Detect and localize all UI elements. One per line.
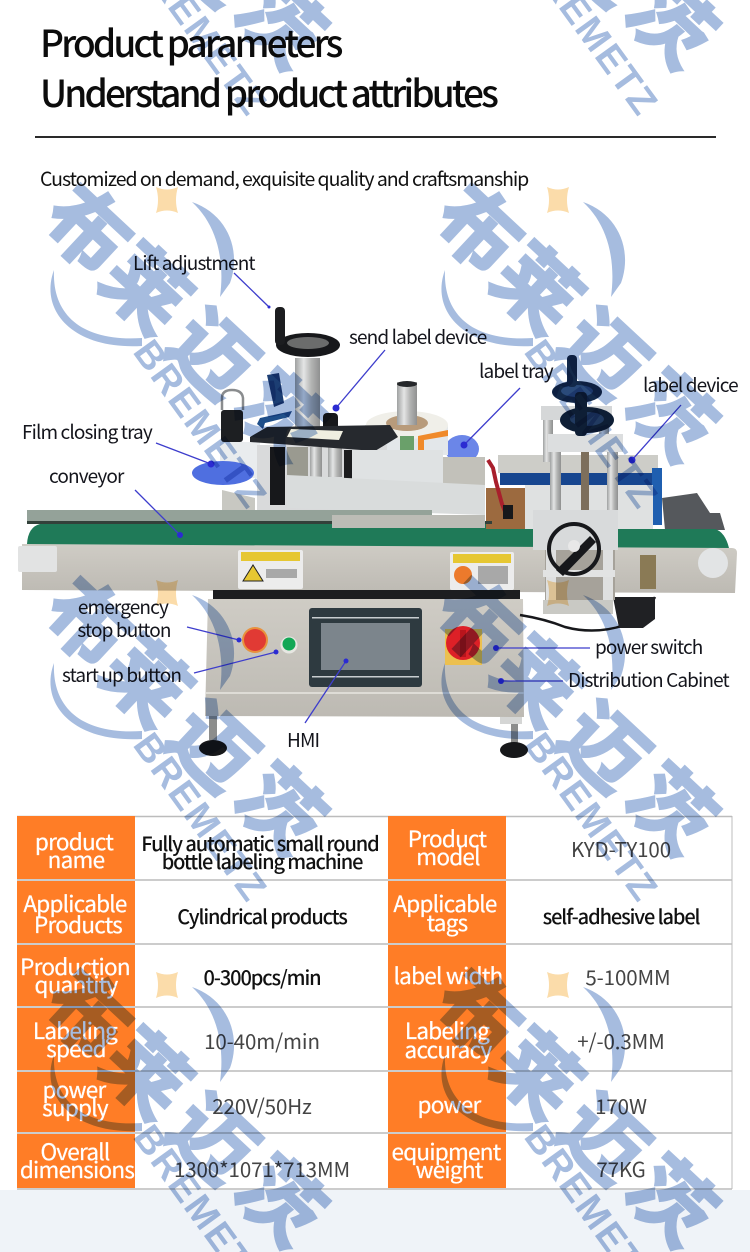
send label device: [250, 425, 485, 515]
callout: Lift adjustment: Lift adjustment: [133, 249, 255, 276]
start button: [280, 636, 298, 654]
feet: [199, 716, 528, 758]
row: power: 170W: [595, 1090, 647, 1120]
title rule: [35, 136, 716, 138]
title: [40, 14, 498, 118]
callout: label device: [628, 371, 738, 464]
machine illustration: [18, 307, 737, 758]
row: dimensions: 1300*1071*713MM: [174, 1153, 350, 1183]
callout: start up button: [62, 650, 278, 688]
row: power: power: [43, 1073, 106, 1105]
row: labeling: Labeling: [405, 1014, 490, 1046]
callout: start up button: start up button: [62, 661, 181, 688]
row: power: 220V/50Hz: [212, 1090, 312, 1120]
watermark tile: 迈: [146, 1064, 288, 1206]
warning label left: [238, 550, 303, 589]
watermark tile: 茨: [605, 734, 747, 876]
watermark tile: [21, 939, 356, 1252]
label roll: [365, 381, 448, 455]
callout: emergency stop button: [77, 593, 242, 643]
row: labeling: 10-40m/min: [204, 1025, 320, 1055]
callout: emergency stop button: emergency: [78, 593, 169, 620]
title: Understand product attributes: [40, 64, 498, 118]
row: product name: Product: [408, 822, 487, 854]
watermark tile: 迈: [537, 279, 679, 421]
title: Product parameters: [40, 14, 343, 68]
watermark tile: 布: [412, 939, 554, 1081]
bottom band: [0, 1190, 750, 1252]
guide rails: [27, 510, 492, 524]
row: product name: bottle labeling machine: [162, 846, 363, 875]
emergency stop button: [242, 627, 268, 653]
watermark tile: [21, 547, 356, 910]
row: product name: Fully automatic small round: [141, 828, 379, 857]
watermark tile: [21, 0, 356, 124]
watermark tile: BREMETZ: [125, 333, 275, 517]
watermark tile: BREMETZ: [516, 333, 666, 517]
row: labeling: +/-0.3MM: [577, 1025, 665, 1055]
beam end plates: [18, 546, 728, 589]
row: applicable: Applicable: [23, 887, 127, 919]
watermark tile: 莱: [79, 214, 221, 356]
callout: Distribution Cabinet: Distribution Cabinet: [568, 666, 730, 693]
label tray: [445, 435, 479, 463]
callout: label tray: [460, 357, 554, 448]
row: applicable: Applicable: [393, 887, 497, 919]
row: production: Production: [20, 950, 130, 982]
callout: Film closing tray: Film closing tray: [22, 418, 153, 445]
watermark tile: 莱: [470, 999, 612, 1141]
cable: [520, 597, 655, 631]
callout: conveyor: conveyor: [49, 462, 125, 489]
callout: Distribution Cabinet: [498, 666, 730, 693]
row: labeling: [33, 1014, 665, 1065]
callout: label tray: label tray: [479, 357, 554, 384]
labeling head: [486, 455, 662, 538]
adjuster column: [533, 355, 623, 614]
callout: send label device: [332, 323, 487, 412]
row: product name: model: [416, 840, 480, 872]
callout: emergency stop button: stop button: [77, 616, 171, 643]
watermark tile: BREMETZ: [125, 726, 275, 910]
row: dimensions: Overall: [40, 1135, 110, 1167]
row: applicable: [23, 887, 701, 940]
watermark tile: 布: [412, 154, 554, 296]
watermark tile: 茨: [214, 734, 356, 876]
subtitle: Customized on demand, exquisite quality and craftsmanship: [40, 163, 529, 192]
table grid: [17, 816, 732, 1189]
lift adjustment column and wheel: [257, 307, 340, 433]
row: power: supply: [42, 1091, 109, 1123]
row: applicable: tags: [427, 906, 468, 938]
row: production: 0-300pcs/min: [204, 962, 320, 991]
watermark tile: 迈: [146, 279, 288, 421]
callout: power switch: [493, 633, 702, 660]
orange label column right: [388, 816, 506, 1188]
watermark tile: 布: [21, 154, 163, 296]
HMI screen: [309, 608, 422, 687]
warning label right: [450, 552, 514, 590]
row: dimensions: 77KG: [596, 1153, 646, 1183]
watermark tile: 茨: [605, 341, 747, 483]
conveyor beam: [22, 544, 737, 593]
callout: conveyor: [49, 462, 183, 538]
watermark tile: BREMETZ: [516, 726, 666, 910]
cabinet: [205, 590, 524, 717]
power switch: [445, 626, 482, 665]
rear motor housing: [613, 597, 655, 628]
watermark tile: [412, 939, 747, 1252]
panel: specification table: [17, 816, 732, 1189]
row: labeling: Labeling: [33, 1014, 118, 1046]
callout: Lift adjustment: [133, 249, 270, 308]
row: dimensions: [20, 1135, 646, 1185]
callout: Film closing tray: [22, 418, 214, 468]
row: production: label width: [394, 959, 502, 991]
watermark tile: 迈: [537, 672, 679, 814]
watermark tile: 迈: [146, 672, 288, 814]
row: power: power: [418, 1088, 481, 1120]
conveyor belt: [27, 524, 729, 548]
row: product name: KYD-TY100: [571, 833, 671, 863]
watermark tile: [412, 154, 747, 517]
motor: [662, 493, 725, 530]
watermark tile: 莱: [79, 999, 221, 1141]
row: product name: name: [48, 843, 105, 875]
guide bar: [332, 515, 485, 528]
row: labeling: speed: [46, 1032, 106, 1064]
row: dimensions: dimensions: [20, 1153, 134, 1185]
callout: power switch: power switch: [595, 633, 702, 660]
watermark tile: [412, 547, 747, 910]
row: production: 5-100MM: [585, 961, 671, 991]
watermark tile: [21, 154, 356, 517]
film closing tray: [192, 390, 260, 510]
row: applicable: Products: [34, 908, 122, 940]
row: power: [42, 1073, 647, 1123]
watermark tile: 莱: [79, 607, 221, 749]
watermark tile: 迈: [537, 1064, 679, 1206]
callout: label device: label device: [643, 371, 738, 398]
row: dimensions: weight: [416, 1153, 484, 1185]
row: dimensions: equipment: [392, 1135, 502, 1167]
watermark tile: 布: [21, 547, 163, 689]
row: labeling: accuracy: [405, 1033, 492, 1065]
callout: send label device: send label device: [349, 323, 487, 350]
row: applicable: self-adhesive label: [543, 901, 701, 930]
watermark tile: 布: [21, 939, 163, 1081]
row: product name: [35, 822, 671, 875]
callout: HMI: [287, 658, 348, 753]
orange label column left: [17, 816, 135, 1188]
watermark tile: 茨: [214, 341, 356, 483]
watermark tile: 布: [412, 547, 554, 689]
row: product name: product: [35, 825, 114, 857]
watermark tile: 莱: [470, 607, 612, 749]
row: applicable: Cylindrical products: [177, 901, 347, 930]
watermark tile: [412, 0, 747, 124]
watermark tile: 莱: [470, 214, 612, 356]
row: production: quantity: [35, 968, 118, 1000]
callout: HMI: HMI: [287, 726, 319, 753]
row: production: [20, 950, 671, 1000]
